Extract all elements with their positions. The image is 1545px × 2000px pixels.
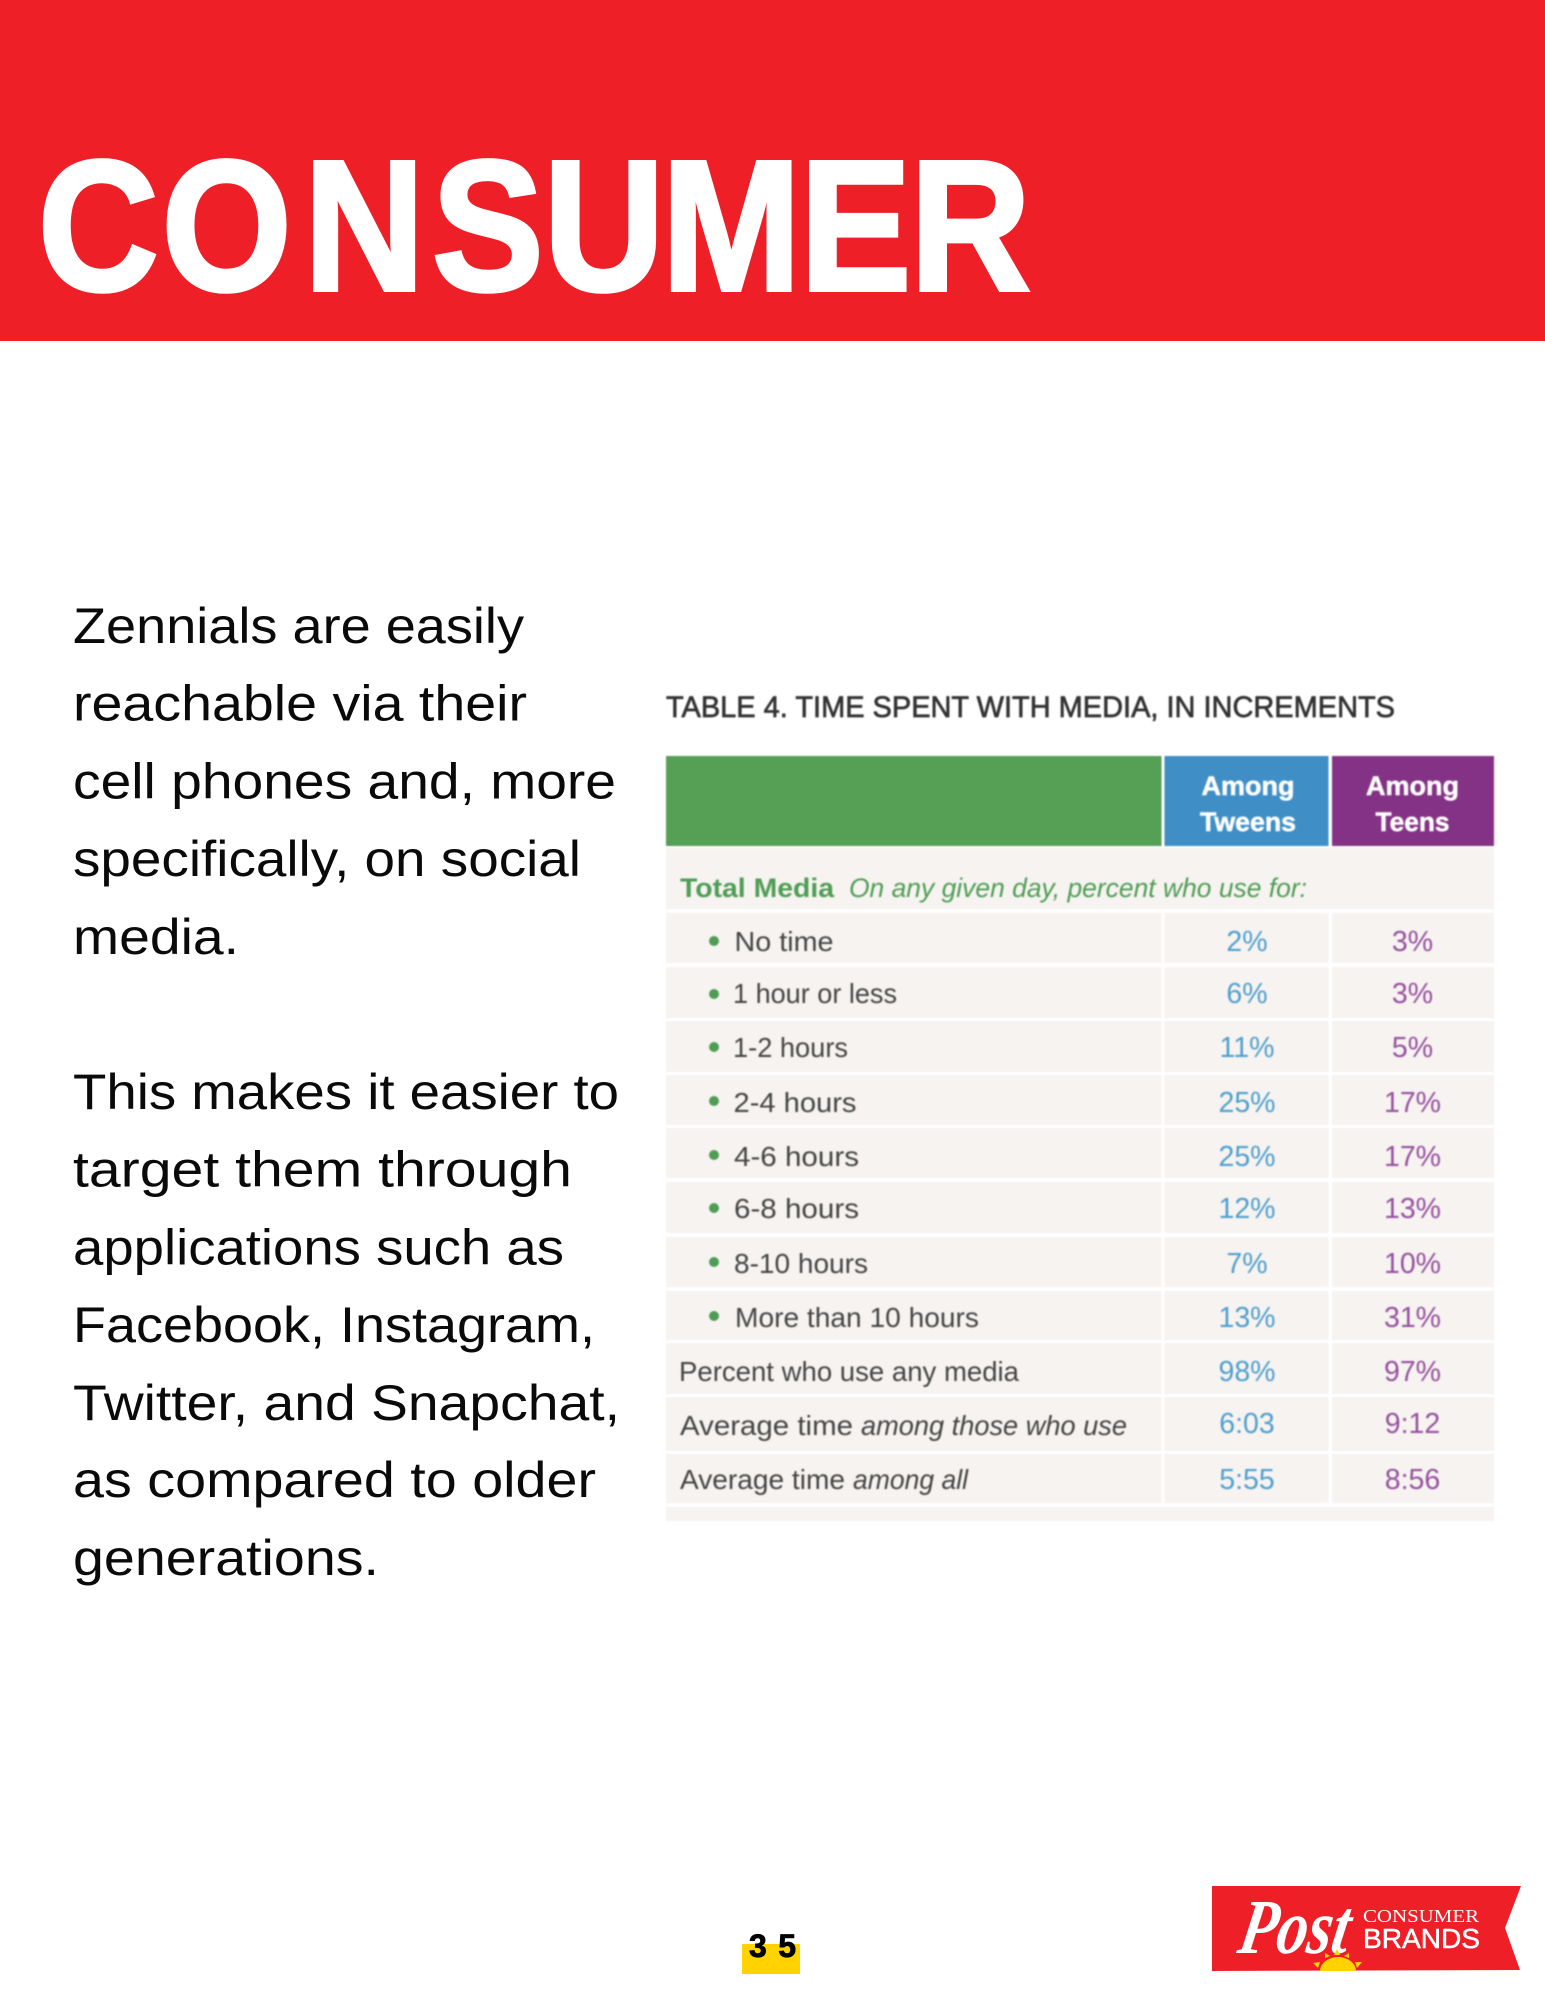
row: No time: [666, 913, 1494, 963]
table sub-heading row: On any given day, percent who use for:: [849, 873, 1307, 903]
table sub-heading row: Total Media: [680, 873, 835, 903]
row: Percent who use any media: 97%: [1384, 1356, 1441, 1388]
row: 2-4 hours: 25%: [1218, 1087, 1276, 1119]
row: 1 hour or less: [666, 967, 1494, 1018]
header banner: [0, 0, 1545, 341]
table header row: [666, 756, 1494, 846]
page number: 3 5: [749, 1928, 796, 1964]
row: Average time among those who use: among those who use: [861, 1410, 1127, 1441]
table heading: TABLE 4. TIME SPENT WITH MEDIA, IN INCREMENTS: [666, 691, 1395, 724]
row: 6-8 hours: 6-8 hours: [734, 1193, 859, 1224]
row: No time: No time: [734, 926, 834, 957]
text block: targeting paragraph: Facebook, Instagram,: [73, 1297, 595, 1353]
text block: targeting paragraph: Twitter, and Snapchat,: [73, 1375, 620, 1431]
row: Average time among all: Average time: [680, 1464, 845, 1495]
text block: targeting paragraph: as compared to older: [73, 1452, 596, 1508]
row: More than 10 hours: [666, 1291, 1494, 1340]
row: 1-2 hours: 11%: [1220, 1032, 1274, 1064]
row: 4-6 hours: 25%: [1218, 1141, 1276, 1173]
row: Average time among those who use: Average time: [680, 1410, 853, 1441]
row: 8-10 hours: 7%: [1226, 1248, 1268, 1280]
logo text: Brands: BRANDS: [1363, 1923, 1480, 1954]
row: Average time among those who use: 9:12: [1385, 1408, 1440, 1440]
text block: targeting paragraph: This makes it easier to: [73, 1064, 619, 1120]
text block: targeting paragraph: target them through: [73, 1142, 572, 1198]
row: Average time among all: among all: [853, 1464, 969, 1495]
icon: sun: [1313, 1949, 1362, 1971]
row: 8-10 hours: 10%: [1384, 1248, 1441, 1280]
row: 4-6 hours: 17%: [1384, 1141, 1441, 1173]
row: 6-8 hours: [666, 1182, 1494, 1233]
text block: intro paragraph: [73, 598, 616, 965]
text block: intro paragraph: reachable via their: [73, 676, 527, 732]
text block: intro paragraph: Zennials are easily: [73, 598, 524, 654]
row: 4-6 hours: [666, 1128, 1494, 1178]
row: 2-4 hours: [666, 1075, 1494, 1125]
page number: [742, 1928, 800, 1974]
row: 1 hour or less: 1 hour or less: [733, 978, 897, 1009]
table sub-heading row: [666, 848, 1494, 909]
row: 1 hour or less: 3%: [1392, 978, 1433, 1010]
row: 2-4 hours: 17%: [1384, 1087, 1441, 1119]
logo wordmark: Post: Post: [1232, 1885, 1360, 1971]
text block: targeting paragraph: applications such as: [73, 1219, 564, 1275]
row: No time: 2%: [1226, 926, 1268, 958]
row: More than 10 hours: 13%: [1218, 1302, 1276, 1334]
text block: intro paragraph: cell phones and, more: [73, 753, 616, 809]
row: Percent who use any media: [666, 1343, 1494, 1394]
text block: targeting paragraph: generations.: [73, 1530, 379, 1586]
row: Average time among all: 8:56: [1385, 1464, 1440, 1496]
row: Average time among all: [666, 1454, 1494, 1503]
title: CONSUMER: [38, 123, 1031, 330]
text block: intro paragraph: specifically, on social: [73, 831, 581, 887]
row: Average time among all: 5:55: [1219, 1464, 1275, 1496]
row: 6-8 hours: 13%: [1384, 1193, 1441, 1225]
row: Average time among those who use: [666, 1397, 1494, 1451]
text block: targeting paragraph: [73, 1064, 620, 1586]
table: time spent with media: [666, 691, 1494, 1521]
table header row: Among: [1366, 771, 1459, 801]
logo: Post Consumer Brands: [1212, 1885, 1521, 1971]
row: 4-6 hours: 4-6 hours: [734, 1141, 859, 1172]
row: 1-2 hours: 5%: [1392, 1032, 1433, 1064]
table header row: Tweens: [1200, 807, 1296, 837]
row: More than 10 hours: More than 10 hours: [735, 1302, 979, 1333]
row: No time: 3%: [1392, 926, 1433, 958]
row: Percent who use any media: 98%: [1218, 1356, 1276, 1388]
row: 8-10 hours: 8-10 hours: [734, 1248, 868, 1279]
row: Average time among those who use: 6:03: [1219, 1408, 1275, 1440]
logo text: Consumer: CONSUMER: [1363, 1906, 1479, 1926]
row: 1-2 hours: [666, 1021, 1494, 1072]
row: More than 10 hours: 31%: [1384, 1302, 1441, 1334]
row: Percent who use any media: Percent who use any media: [679, 1356, 1019, 1387]
row: 8-10 hours: [666, 1237, 1494, 1287]
row: 1-2 hours: 1-2 hours: [733, 1032, 848, 1063]
row: 2-4 hours: 2-4 hours: [734, 1087, 856, 1118]
row: 1 hour or less: 6%: [1226, 978, 1268, 1010]
row: 6-8 hours: 12%: [1218, 1193, 1276, 1225]
table header row: Among: [1202, 771, 1294, 801]
table header row: Teens: [1376, 807, 1450, 837]
text block: intro paragraph: media.: [73, 909, 239, 965]
